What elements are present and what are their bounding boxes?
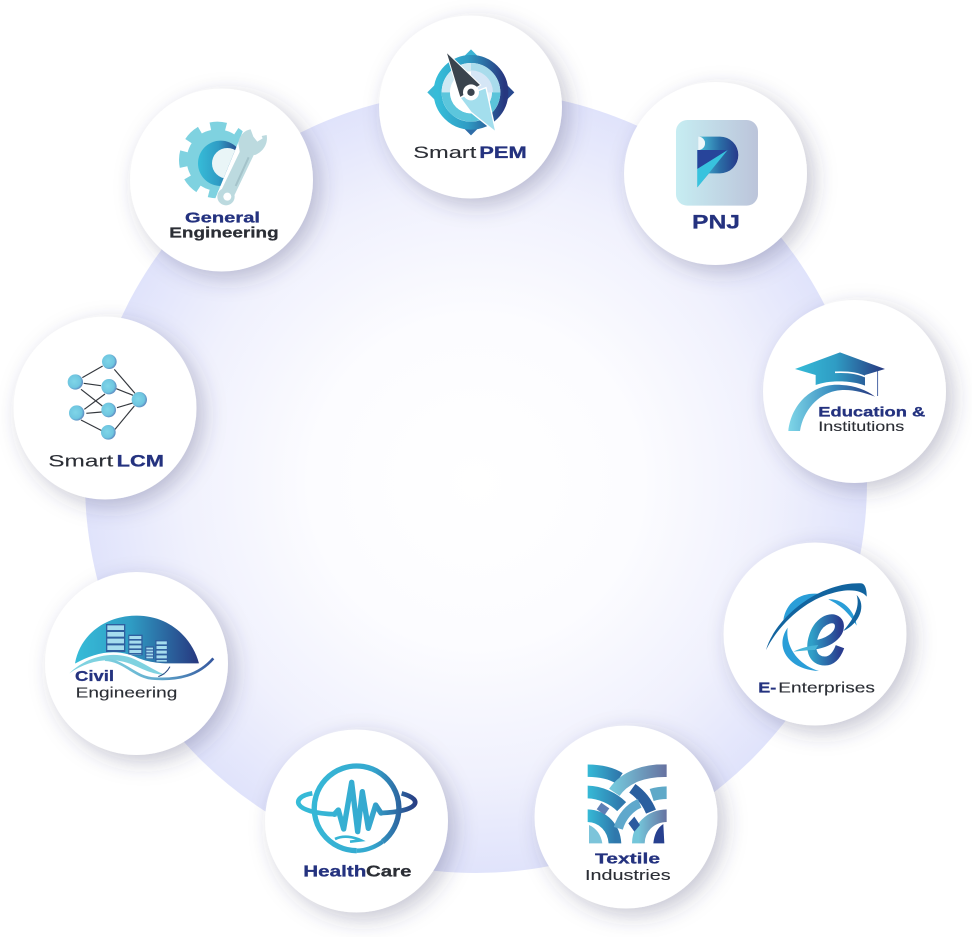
icon: gear and wrench (178, 120, 267, 205)
label: PNJ: PNJ (692, 212, 740, 234)
label: Industries: Industries (585, 867, 671, 884)
panel: PNJ (624, 82, 807, 265)
panel: SmartPEM (379, 16, 562, 198)
panel: General Engineering (130, 88, 313, 272)
panel: HealthCare (265, 730, 448, 912)
icon: woven arcs (587, 771, 668, 844)
background circle (85, 91, 867, 873)
icon: PNJ logo (676, 120, 758, 206)
label: SmartLCM: LCM (117, 453, 164, 471)
icon: city dome and waves (69, 616, 213, 680)
icon: compass (427, 49, 514, 135)
panel: E-Enterprises (724, 542, 906, 726)
label: Engineering: Engineering (76, 685, 177, 702)
icon: graduation cap (788, 352, 885, 431)
label: Textile: Textile (595, 851, 660, 868)
label: SmartPEM: Smart (413, 144, 477, 162)
panel: Civil Engineering (45, 572, 228, 755)
icon: pulse globe (298, 766, 415, 851)
label: HealthCare: Care (366, 864, 412, 881)
label: SmartLCM: Smart (48, 453, 114, 471)
label: HealthCare: Health (303, 864, 366, 881)
label: Engineering: Engineering (169, 224, 279, 241)
label: E-Enterprises: Enterprises (778, 680, 875, 697)
label: Civil: Civil (75, 668, 114, 685)
panel: SmartLCM (14, 316, 196, 500)
label: General: General (185, 210, 260, 227)
icon: neural network (68, 354, 147, 440)
panel: Education & Institutions (763, 300, 946, 483)
panel: Textile Industries (534, 726, 718, 908)
label: Institutions: Institutions (818, 418, 904, 434)
label: E-Enterprises: E- (758, 680, 776, 697)
label: Education &: Education & (818, 404, 925, 420)
label: SmartPEM: PEM (479, 144, 527, 162)
icon: e with swooshes (766, 583, 867, 671)
